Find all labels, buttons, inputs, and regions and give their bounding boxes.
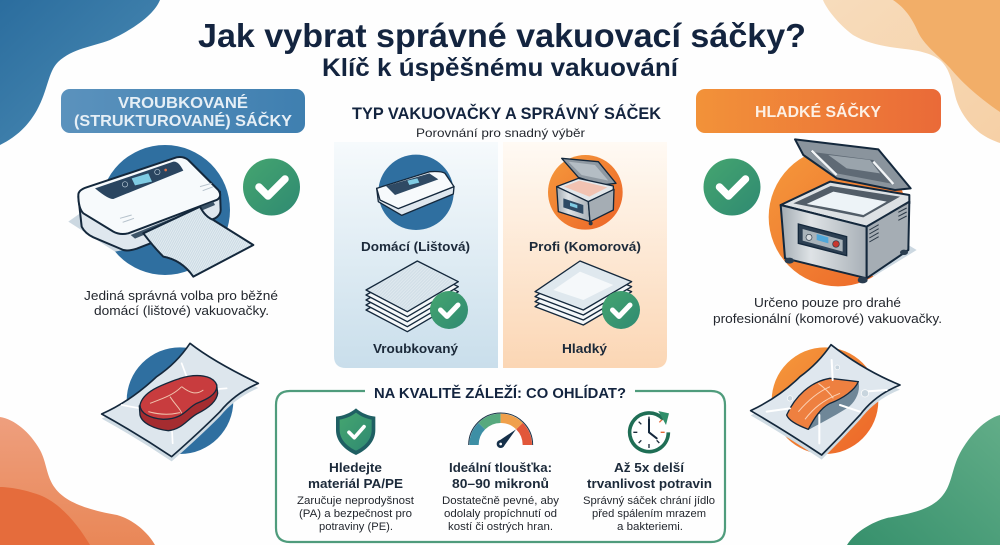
- text: material heading: Hledejte: [329, 460, 382, 475]
- text: shelf life description: a bakteriemi.: [617, 521, 683, 533]
- text: material description: potraviny (PE).: [319, 521, 393, 533]
- icon: small home sealer: [377, 155, 454, 230]
- icon: home bar vacuum sealer: [68, 145, 253, 277]
- background blob: top right orange: [823, 0, 1000, 143]
- icon: clock with arrow: [630, 411, 669, 452]
- text: thickness description: odolaly propíchnutí od: [444, 508, 557, 520]
- text: ribbed bags description: [84, 289, 278, 318]
- icon: chamber vacuum sealer: [769, 139, 917, 286]
- heading: smooth bags: HLADKÉ SÁČKY: [755, 102, 881, 121]
- panel: home machines column: [334, 142, 498, 368]
- panel frame: [276, 391, 725, 542]
- text: material description: Zaručuje neprodyšnost: [297, 495, 414, 507]
- column: material: [297, 408, 414, 533]
- text: pro type label: Profi (Komorová): [529, 239, 641, 254]
- text: thickness heading: 80–90 mikronů: [452, 476, 549, 491]
- heading: smooth bags: [696, 89, 941, 133]
- text: thickness description: Dostatečně pevné, aby: [442, 495, 560, 507]
- text: smooth bags description: Určeno pouze pro drahé: [754, 296, 901, 310]
- text: thickness description: kostí či ostrých hran.: [448, 521, 553, 533]
- panel: central comparison: [334, 104, 667, 368]
- text: material heading: [308, 460, 403, 491]
- text: ribbed label: Vroubkovaný: [373, 341, 459, 356]
- heading: ribbed bags: [61, 89, 305, 133]
- column: thickness: [442, 413, 560, 533]
- icon: green check: [430, 291, 468, 329]
- text: shelf life description: [583, 495, 715, 533]
- heading: ribbed bags: VROUBKOVANÉ: [118, 93, 248, 112]
- text: ribbed bags description: domácí (lištové) vakuovačky.: [94, 304, 269, 318]
- text: smooth label: Hladký: [562, 341, 608, 356]
- icon: vacuum-packed steak: [102, 343, 258, 461]
- panel: left column, ribbed bags: [61, 89, 305, 461]
- heading: comparison: [352, 104, 662, 140]
- text: thickness description: [442, 495, 560, 533]
- icon: green check: [243, 158, 300, 216]
- icon: stack of smooth bags: [535, 261, 632, 325]
- icon: gauge: [469, 413, 533, 448]
- panel: professional machines column: [503, 142, 667, 368]
- background blob: top left blue: [0, 0, 160, 145]
- text: shelf life description: před spálením mrazem: [592, 508, 706, 520]
- text: home type label: Domácí (Lištová): [361, 239, 470, 254]
- text: smooth bags description: [713, 296, 942, 326]
- title: Klíč k úspěšnému vakuování: [322, 54, 679, 82]
- icon: small chamber sealer: [548, 155, 623, 230]
- text: thickness heading: Ideální tloušťka:: [449, 460, 552, 475]
- text: material heading: materiál PA/PE: [308, 476, 403, 491]
- title: Jak vybrat správné vakuovací sáčky?: [198, 17, 806, 54]
- icon: green check: [704, 158, 760, 216]
- background blob: bottom left orange: [0, 417, 155, 545]
- heading: comparison: TYP VAKUOVAČKY A SPRÁVNÝ SÁČEK: [352, 104, 662, 123]
- text: smooth bags description: profesionální (komorové) vakuovačky.: [713, 312, 942, 326]
- column: shelf life: [583, 411, 715, 533]
- text: material description: (PA) a bezpečnost pro: [299, 508, 412, 520]
- text: thickness heading: [449, 460, 552, 491]
- panel: right column, smooth bags: [696, 89, 942, 460]
- text: shelf life heading: Až 5x delší: [614, 460, 684, 475]
- icon: green check: [602, 291, 640, 329]
- heading: comparison: Porovnání pro snadný výběr: [416, 126, 585, 140]
- icon: stack of ribbed bags: [366, 261, 458, 332]
- heading: quality: NA KVALITĚ ZÁLEŽÍ: CO OHLÍDAT?: [374, 384, 626, 402]
- text: shelf life description: Správný sáček chrání jídlo: [583, 495, 715, 507]
- text: ribbed bags description: Jediná správná volba pro běžné: [84, 289, 278, 303]
- panel: quality checklist: [276, 384, 725, 542]
- text: shelf life heading: trvanlivost potravin: [587, 476, 712, 491]
- title: [198, 17, 806, 82]
- heading: ribbed bags: (STRUKTUROVANÉ) SÁČKY: [74, 111, 292, 130]
- text: material description: [297, 495, 414, 533]
- text: shelf life heading: [587, 460, 712, 491]
- icon: shield: [336, 408, 375, 455]
- background blob: bottom right green: [847, 415, 1000, 545]
- icon: vacuum-packed salmon: [751, 345, 900, 460]
